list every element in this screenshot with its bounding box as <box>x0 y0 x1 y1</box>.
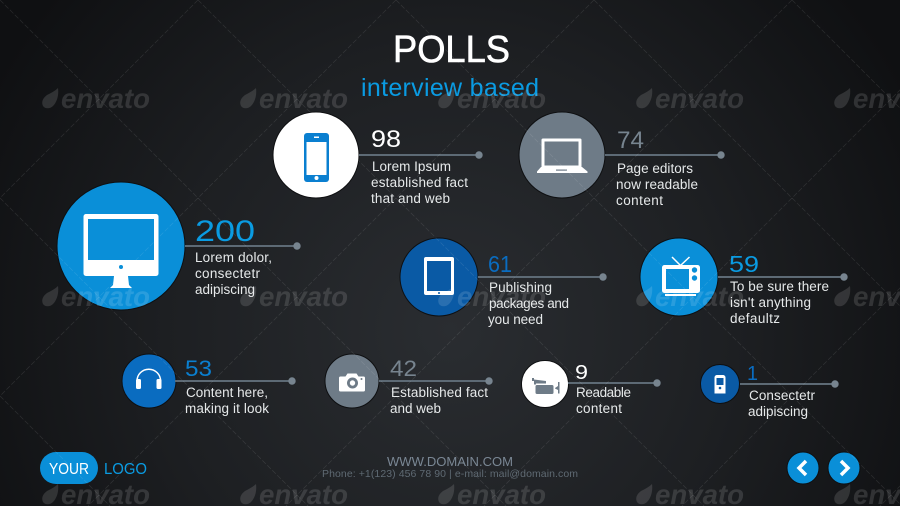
item: tablet 61 <box>400 238 607 327</box>
watermark: envato marks: envato <box>655 83 744 114</box>
description: now readable <box>616 177 698 192</box>
description: content <box>616 193 663 208</box>
description: isn't anything <box>730 295 811 310</box>
value: 9 <box>575 362 588 384</box>
button: next arrow <box>828 452 860 484</box>
value: 42 <box>390 356 417 381</box>
icon: tablet <box>424 257 454 295</box>
item: video camera 9 <box>522 360 661 416</box>
value: 74 <box>617 127 644 154</box>
icon: smartphone <box>304 133 329 182</box>
watermark: envato marks: envato <box>61 281 150 312</box>
description: Page editors <box>617 161 693 176</box>
logo <box>40 452 147 484</box>
footer domain: WWW.DOMAIN.COM <box>387 454 513 469</box>
description: Lorem Ipsum <box>372 159 451 174</box>
watermark: envato marks: envato <box>457 281 546 312</box>
watermark: envato marks: envato <box>457 83 546 114</box>
logo: YOUR <box>49 461 89 478</box>
description: Publishing <box>489 280 552 295</box>
value: 61 <box>488 251 512 277</box>
description: and web <box>390 401 441 416</box>
value: 200 <box>195 215 255 248</box>
description: packages and <box>489 296 569 311</box>
icon: voice recorder <box>714 375 726 394</box>
value: 1 <box>747 363 758 385</box>
item: phone 98 <box>273 112 483 206</box>
value: 53 <box>185 356 212 381</box>
title: POLLS <box>393 29 510 71</box>
description: you need <box>488 312 543 327</box>
description: adipiscing <box>748 404 808 419</box>
watermark: envato marks: envato <box>61 83 150 114</box>
description: content <box>576 401 622 416</box>
description: Readable <box>576 385 631 400</box>
icon: television <box>662 257 700 296</box>
icon: camera <box>339 374 365 392</box>
item: camera 42 <box>325 354 493 416</box>
subtitle: interview based <box>361 74 539 102</box>
value: 98 <box>371 126 401 153</box>
description: that and web <box>371 191 450 206</box>
item: recorder 1 <box>700 363 839 419</box>
icon: video camera <box>532 378 560 394</box>
value: 59 <box>729 251 759 277</box>
watermark: envato marks: envato <box>259 83 348 114</box>
watermark: envato marks: envato <box>259 281 348 312</box>
description: established fact <box>371 175 468 190</box>
icon: desktop monitor <box>84 214 158 288</box>
item: laptop 74 <box>519 112 725 208</box>
item: tv 59 <box>640 238 848 326</box>
description: Consectetr <box>749 388 816 403</box>
description: consectetr <box>195 266 260 281</box>
icon: headphones <box>136 369 162 389</box>
description: defaultz <box>730 311 780 326</box>
description: To be sure there <box>730 279 829 294</box>
description: Established fact <box>391 385 488 400</box>
description: Lorem dolor, <box>195 250 272 265</box>
item: headphones 53 <box>122 354 296 416</box>
description: adipiscing <box>195 282 255 297</box>
footer contact: Phone: +1(123) 456 78 90 | e-mail: mail@domain.com <box>322 468 578 480</box>
watermark: envato marks: envato <box>655 281 744 312</box>
item: monitor 200 <box>57 182 301 310</box>
logo: LOGO <box>104 461 147 478</box>
watermark: envato marks <box>42 83 900 506</box>
description: making it look <box>185 401 269 416</box>
icon: laptop <box>537 138 588 173</box>
button: previous arrow <box>787 452 819 484</box>
description: Content here, <box>186 385 268 400</box>
